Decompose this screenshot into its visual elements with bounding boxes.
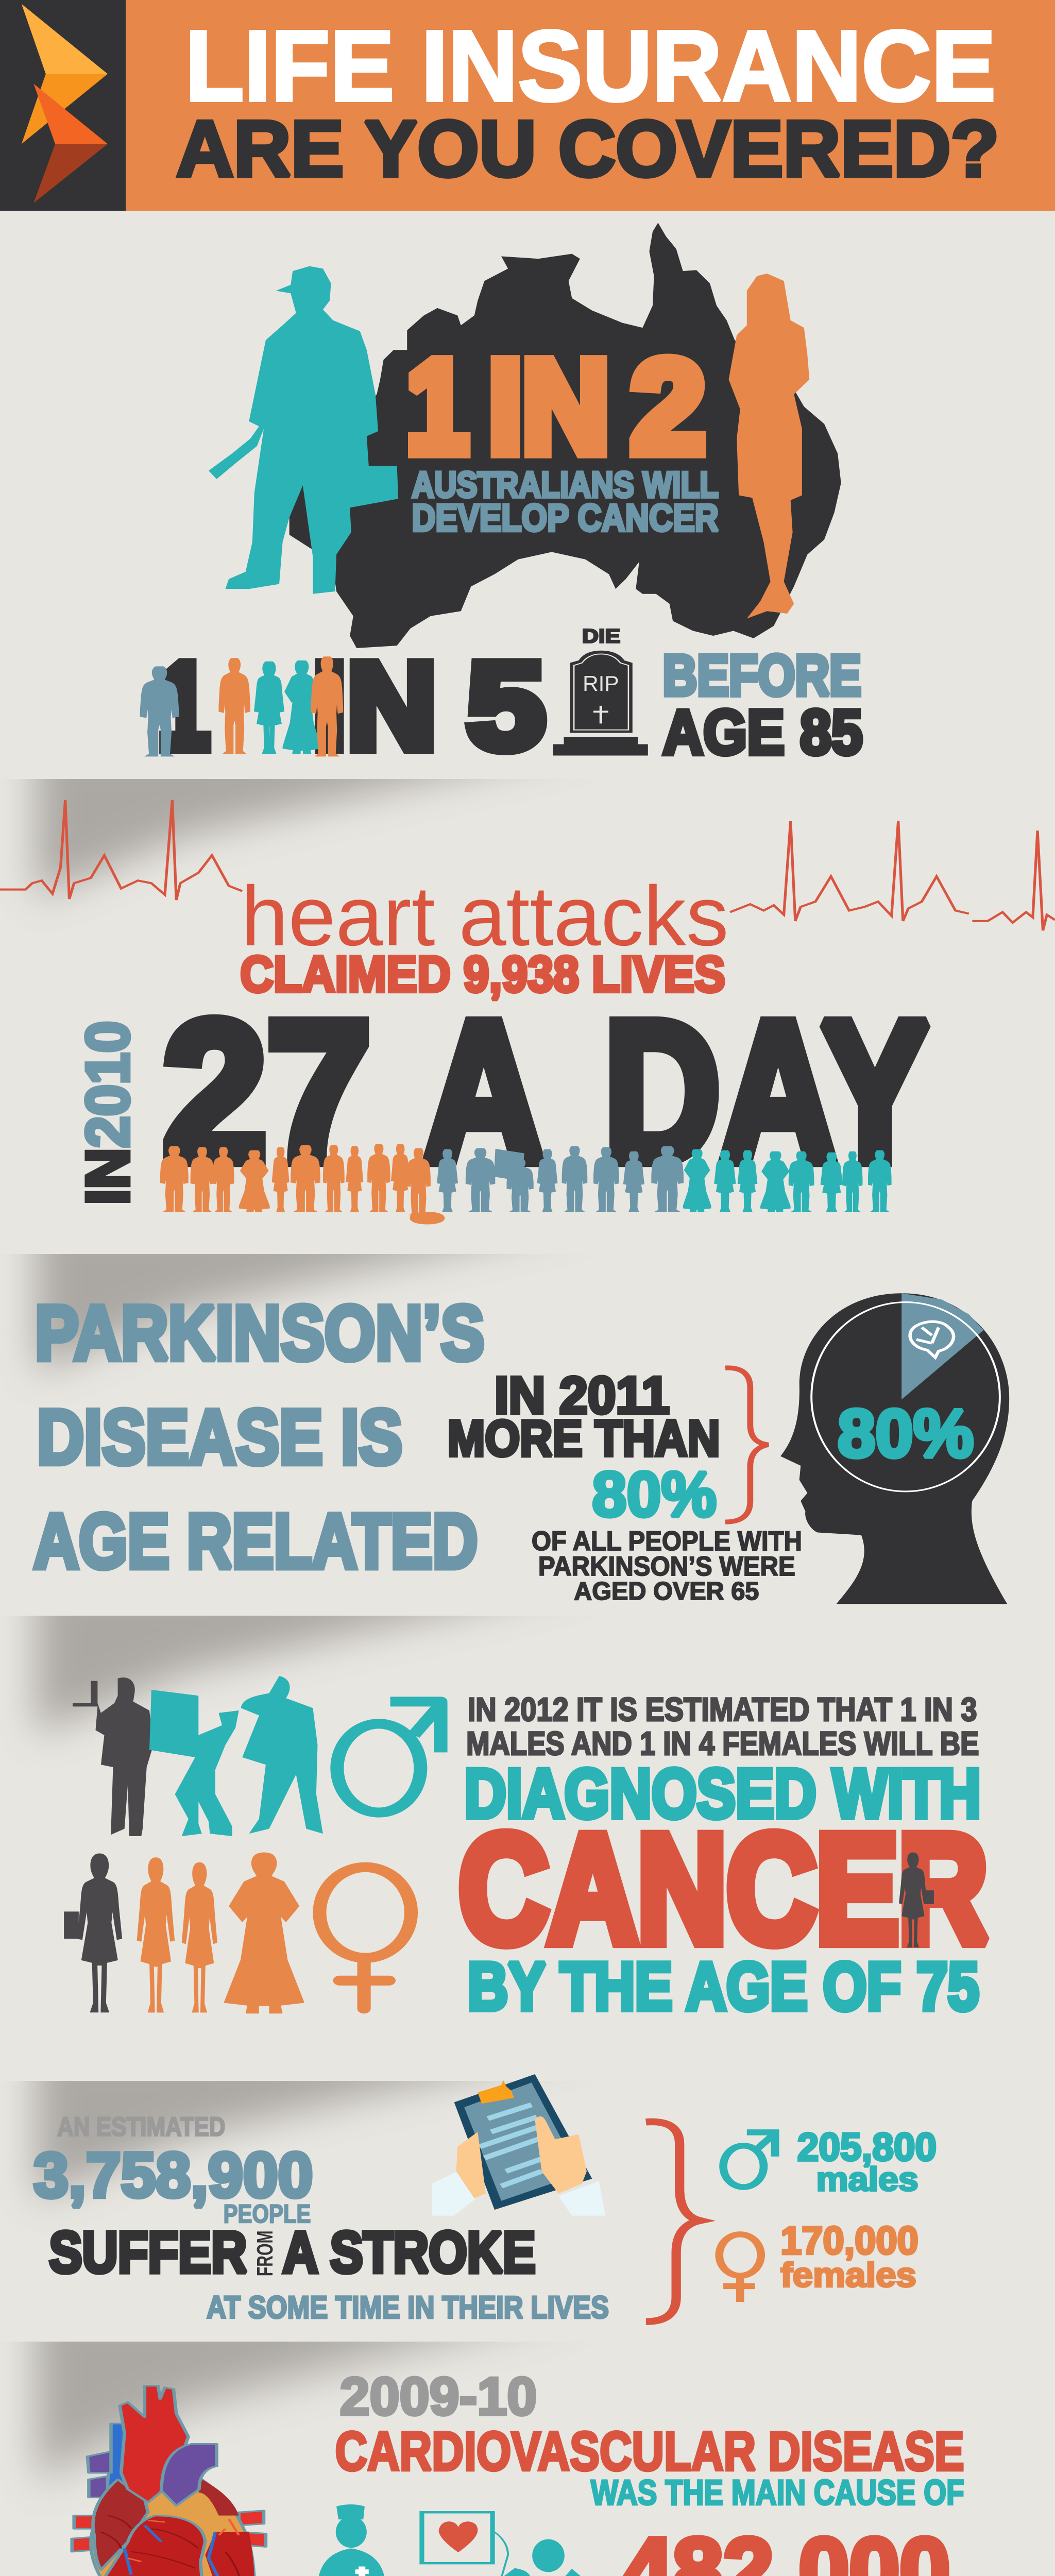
text: before age 85: AGE 85 [663,697,862,768]
text: stroke statistic: SUFFER [49,2220,247,2285]
text: Australians will develop cancer: DEVELOP CANCER [412,496,719,539]
header title banner [126,0,1055,211]
text: stroke statistic: AT SOME TIME IN THEIR LIVES [207,2290,609,2325]
text: 170,000 females: 170,000 [780,2219,918,2263]
icon: tombstone [553,651,648,756]
icon: female symbol small [719,2234,761,2302]
stat: 1 in 2: IN [488,333,609,480]
text: in 2011 more than 80%: 80% [592,1459,717,1530]
text: of all people with Parkinson's: OF ALL PEOPLE WITH [532,1526,802,1556]
stat: 1 in 5 [158,637,545,775]
icon: female symbol [319,1867,411,2009]
stat: 27 a day: A [424,980,543,1203]
text: Australians will develop cancer [412,464,719,539]
icon: clipboard with hands [432,2074,606,2216]
text: cancer statistic [459,1691,988,2024]
text: in 2011 more than 80%: MORE THAN [448,1410,720,1466]
stat: 1 in 2 [406,333,705,480]
icon: patient on hospital chair [385,2539,589,2576]
text: claimed 9,938 lives: CLAIMED 9,938 LIVES [240,946,725,1002]
text: stroke statistic: 3,758,900 [33,2140,313,2211]
text: before age 85: BEFORE [663,643,861,707]
text: 2009-10 [340,2366,537,2426]
text: of all people with Parkinson's [532,1526,802,1605]
small woman on cancer word [899,1853,934,1947]
head profile with pie chart [780,1293,1009,1604]
text: 205,800 males: 205,800 [797,2125,937,2169]
text: in 2011 more than 80%: IN 2011 [495,1366,670,1425]
male figures [73,1676,323,1836]
text: 170,000 females [780,2219,918,2294]
heading: Parkinson's disease is age related: AGE RELATED [33,1498,478,1584]
heading: Parkinson's disease is age related: DISEASE IS [37,1394,402,1480]
text: stroke statistic: A STROKE [283,2220,536,2285]
heading: Parkinson's disease is age related: PARKINSON’S [35,1290,484,1376]
icon: nurse [317,2504,385,2576]
female figures [64,1853,304,2013]
text: of all people with Parkinson's: AGED OVER 65 [574,1577,759,1605]
icon: tombstone: RIP [583,671,619,696]
icon: heart monitor [422,2512,508,2576]
map of Australia [290,223,841,648]
text: die: DIE [582,625,620,647]
stat: 27 a day [163,980,928,1203]
text: 205,800 males [797,2125,937,2198]
orange woman silhouette [729,274,809,619]
heading: Parkinson's disease is age related [33,1290,484,1584]
brace [646,2122,700,2321]
text: 170,000 females: females [780,2255,916,2294]
row of people silhouettes [161,1144,891,1222]
stat: 1 in 5: IN [312,637,437,775]
icon: male symbol small [723,2132,775,2187]
teal worker silhouette [209,266,398,594]
text: heart attacks: heart attacks [241,869,729,963]
text: 205,800 males: males [816,2161,918,2198]
header logo panel [0,0,126,211]
stat: 1 in 5: 5 [467,637,545,775]
text: in 2011 more than 80% [448,1366,720,1530]
small people group [141,656,343,756]
stat: 27 a day: 27 [163,980,371,1203]
text: in 2010 vertical: IN2010 [75,1021,142,1205]
ECG line left [0,800,242,900]
text: before age 85 [663,643,862,768]
text: of all people with Parkinson's: PARKINSON’S WERE [538,1551,795,1581]
icon: male symbol [337,1702,441,1812]
text: stroke statistic: FROM [253,2230,278,2276]
text: stroke statistic: PEOPLE [224,2199,311,2228]
brace [725,1368,769,1522]
text: stroke statistic [33,2112,609,2325]
text: Australians will develop cancer: AUSTRALIANS WILL [412,464,719,505]
head profile with pie chart: 80% [838,1396,974,1471]
icon: anatomical heart [72,2386,266,2576]
stat: 1 in 2: 1 [406,333,468,480]
stat: 1 in 5: 1 [158,637,210,775]
stat: 1 in 2: 2 [631,333,705,480]
ECG line right [730,821,1055,930]
text: stroke statistic: AN ESTIMATED [57,2112,226,2142]
